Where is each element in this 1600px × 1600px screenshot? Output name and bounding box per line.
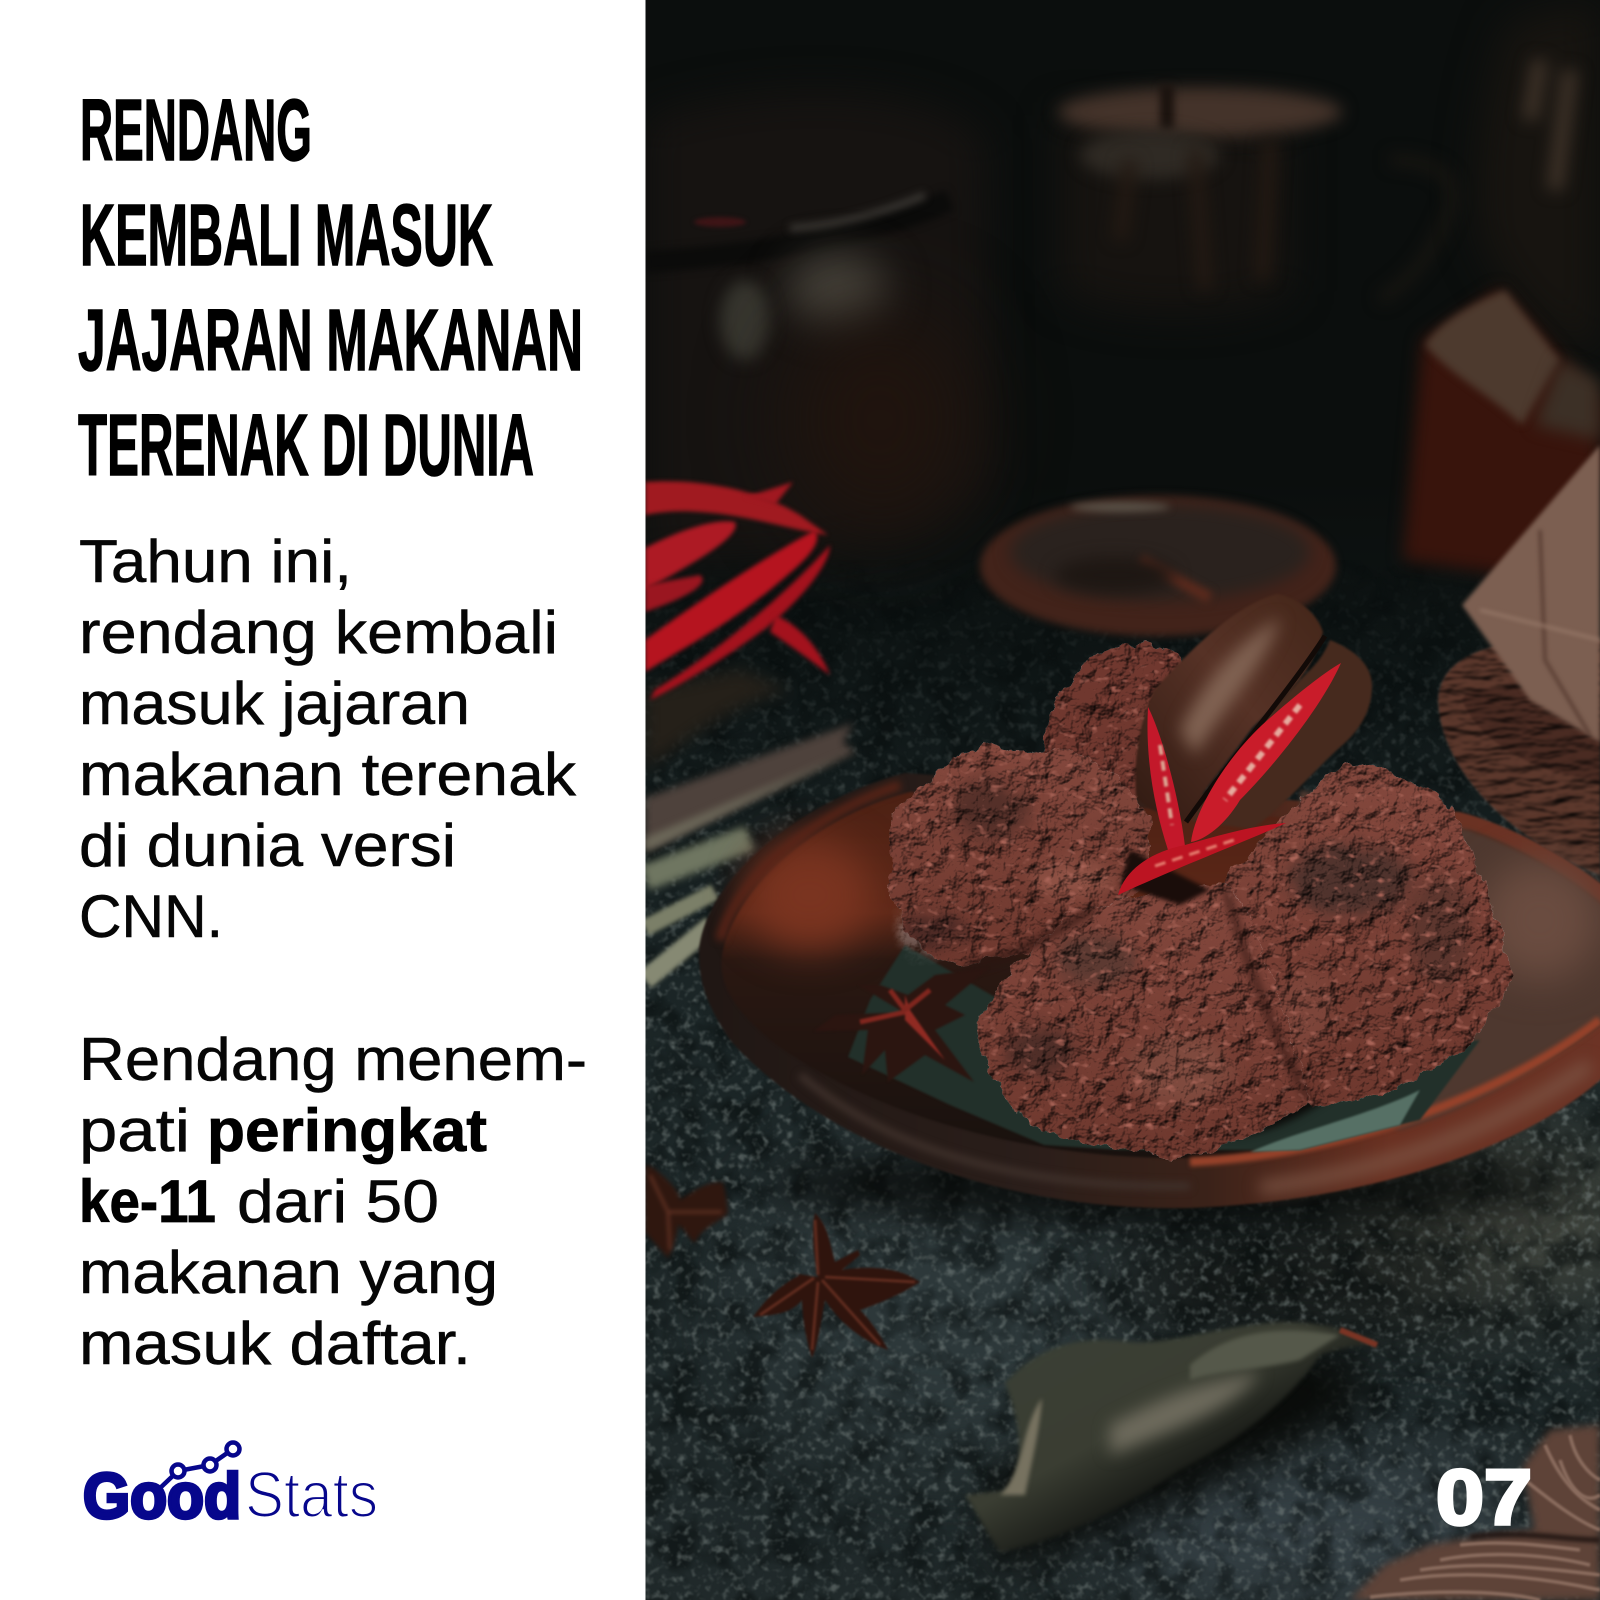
title: TERENAK DI DUNIA — [78, 397, 534, 494]
dried kaffir leaf — [965, 1322, 1377, 1570]
logo: GoodStats: Stats — [245, 1458, 378, 1531]
star anise on plate — [858, 972, 972, 1081]
paragraph: ranking 11 of 50: ke-11 — [79, 1168, 216, 1235]
banana leaf lining — [848, 945, 1480, 1152]
logo: GoodStats: Good — [83, 1460, 241, 1532]
logo: GoodStats — [83, 1442, 378, 1532]
paragraph: ranking 11 of 50: peringkat — [207, 1097, 487, 1164]
paragraph: rendang returns to CNN list: Tahun ini, — [79, 528, 352, 595]
paragraph: rendang returns to CNN list: di dunia versi — [79, 812, 456, 879]
paragraph: rendang returns to CNN list — [79, 528, 577, 950]
table and dark backdrop — [645, 0, 1600, 1600]
paragraph: rendang returns to CNN list: CNN. — [79, 883, 223, 950]
woven cloth fringe — [1350, 1425, 1600, 1600]
star anise: large on table — [753, 1213, 920, 1358]
paragraph: rendang returns to CNN list: masuk jajaran — [79, 670, 470, 737]
page number 07: 07 — [1436, 1453, 1532, 1541]
paragraph: ranking 11 of 50 — [79, 1026, 587, 1377]
background wooden cup — [1052, 80, 1346, 300]
title — [78, 82, 583, 494]
ketupat parcel — [1462, 445, 1600, 742]
title: KEMBALI MASUK — [80, 187, 493, 284]
paragraph: ranking 11 of 50: masuk daftar. — [79, 1310, 471, 1377]
panel: rendang photo illustration — [645, 0, 1600, 1600]
red chili slices — [1118, 663, 1341, 895]
paragraph: ranking 11 of 50: dari 50 — [237, 1168, 439, 1235]
background clay pot — [645, 92, 990, 562]
star anise: small on table — [645, 1165, 728, 1258]
paragraph: rendang returns to CNN list: makanan terenak — [79, 741, 577, 808]
lemongrass stalks — [645, 723, 856, 980]
dark leaf garnish — [1135, 594, 1372, 829]
rendang chunks — [890, 644, 1510, 1158]
title: RENDANG — [80, 82, 312, 179]
background jar right — [1488, 20, 1591, 328]
title: JAJARAN MAKANAN — [78, 292, 583, 389]
stacked woven bowl — [1438, 639, 1600, 875]
paragraph: ranking 11 of 50: makanan yang — [79, 1239, 498, 1306]
paragraph: ranking 11 of 50: Rendang menem- — [79, 1026, 587, 1093]
small background bowl — [980, 496, 1336, 636]
wooden block — [1403, 288, 1600, 575]
paragraph: rendang returns to CNN list: rendang kembali — [79, 599, 558, 666]
left white panel — [0, 0, 646, 1600]
main plate — [699, 773, 1600, 1221]
red chilies — [645, 481, 830, 770]
paragraph: ranking 11 of 50: pati — [79, 1097, 190, 1164]
